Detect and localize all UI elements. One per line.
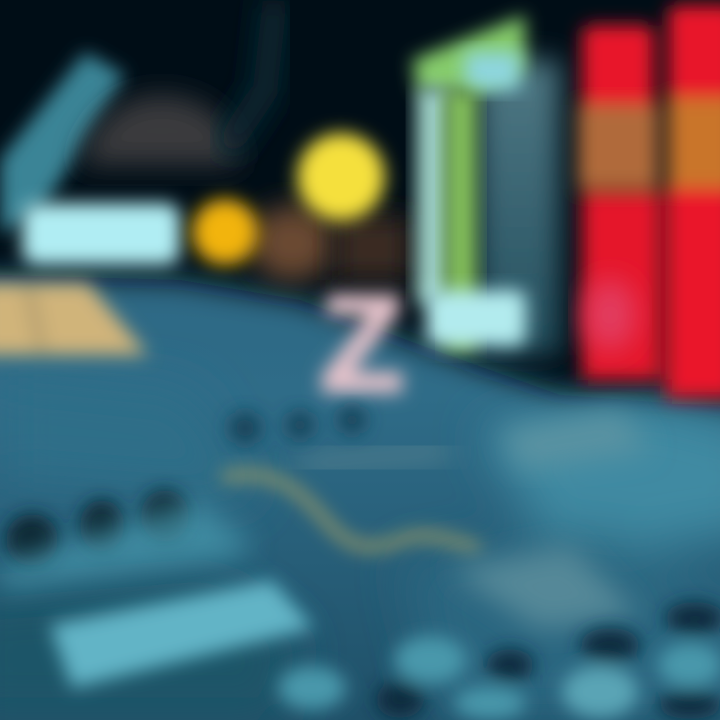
bottom keys bbox=[278, 602, 720, 719]
teal diagonal arm bbox=[0, 52, 125, 235]
mark 2 bbox=[286, 411, 314, 439]
yellow circle bbox=[297, 133, 385, 221]
light cyan bar bbox=[22, 203, 180, 265]
dark key 3 bbox=[665, 602, 720, 634]
dark dome bbox=[80, 95, 240, 165]
key 2 bbox=[80, 500, 124, 552]
brown haze bbox=[335, 215, 410, 280]
mark 1 bbox=[229, 412, 261, 444]
orange yellow circle bbox=[192, 199, 258, 265]
column body bbox=[478, 60, 560, 355]
red block lower left bbox=[582, 192, 660, 380]
lower panel bands bbox=[0, 370, 720, 720]
column top bbox=[412, 15, 525, 92]
dark key 1 bbox=[486, 649, 534, 681]
pale column side bbox=[416, 88, 450, 303]
red block top left bbox=[582, 25, 654, 115]
light teal lower bar bbox=[50, 580, 314, 688]
red blocks bbox=[578, 5, 720, 398]
tan fan body bbox=[0, 283, 148, 355]
key 1 bbox=[6, 514, 58, 566]
column highlight bbox=[465, 52, 520, 90]
light key 5 bbox=[454, 687, 526, 719]
green stem bbox=[445, 90, 477, 350]
dark key 4 bbox=[376, 682, 424, 718]
tan trace line bbox=[222, 474, 480, 548]
brown band left bbox=[578, 105, 658, 189]
red block lower right bbox=[666, 188, 720, 398]
red block top right bbox=[668, 5, 720, 110]
fan stripe bbox=[28, 285, 42, 352]
dark keys left bbox=[6, 490, 189, 566]
light cyan base bbox=[426, 290, 526, 346]
light key 1 bbox=[278, 666, 346, 710]
light key 2 bbox=[394, 636, 466, 684]
pink glow in red block bbox=[584, 279, 636, 351]
tan fan bbox=[0, 283, 148, 355]
muted trace line bbox=[300, 450, 450, 465]
light key 4 bbox=[658, 643, 720, 687]
faint dark teal strand bbox=[225, 0, 275, 150]
small dark marks bbox=[229, 406, 366, 444]
dark key 5 bbox=[658, 691, 720, 719]
dark upper backdrop bbox=[0, 0, 720, 410]
orange band right bbox=[668, 98, 720, 188]
dark key 2 bbox=[580, 628, 640, 662]
light key 3 bbox=[562, 666, 638, 718]
pale grey panel bottom bbox=[450, 545, 640, 630]
pink Z glyph: Z bbox=[321, 268, 403, 419]
cyan strip under keys bbox=[0, 500, 255, 590]
mark 3 bbox=[338, 406, 366, 434]
key 3 bbox=[141, 490, 189, 542]
pale teal panel right bbox=[500, 410, 650, 470]
brown blob bbox=[250, 205, 334, 281]
